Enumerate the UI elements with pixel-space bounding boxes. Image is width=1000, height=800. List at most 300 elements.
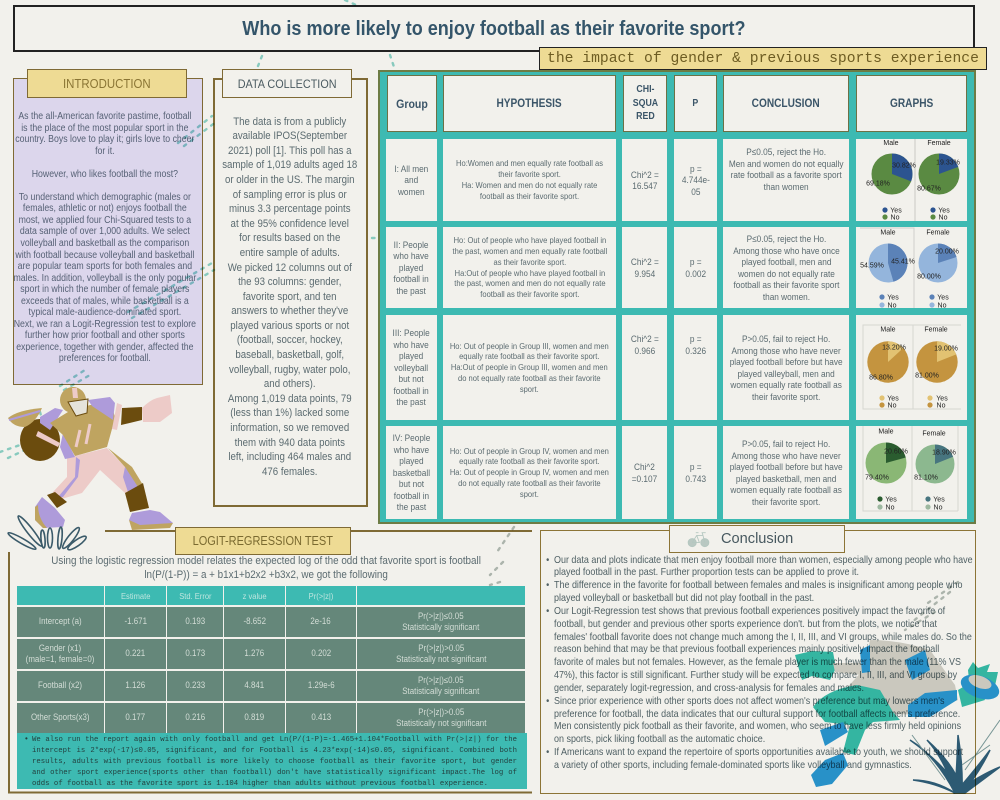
regression note: • <box>25 734 28 743</box>
regression table: Statistically significant <box>402 686 480 696</box>
heading: introduction: INTRODUCTION <box>63 76 151 91</box>
regression table: 2e-16 <box>311 616 331 626</box>
heading: logit-regression test: LOGIT-REGRESSION TEST <box>193 534 333 548</box>
chart: group IV pies: 20.60% <box>884 448 908 456</box>
panel: conclusion: • <box>546 554 549 566</box>
introduction body text: most, we applied four Chi-Squared tests to a <box>18 215 191 226</box>
regression table: Estimate <box>121 590 150 600</box>
hypothesis III: Ha:Out of people in Group III, women and men <box>451 362 608 372</box>
regression table: 1.29e-6 <box>308 680 334 690</box>
chart: group I pies: Yes <box>890 208 902 214</box>
conclusion III: P>0.05, fail to reject Ho. <box>742 333 830 344</box>
introduction body text: further how prior football and other sports <box>25 330 184 341</box>
group IV: the past <box>397 501 426 512</box>
row: football <box>17 671 104 701</box>
conclusion IV: played basketball, men and <box>736 472 836 484</box>
conclusion III: women equally rate football as <box>730 379 842 390</box>
row: football: Football (x2) <box>38 680 83 690</box>
conclusion I: rate football as a favorite sport <box>731 169 841 180</box>
introduction body text: exceeds that of males, while basketball is a <box>21 296 188 307</box>
chart: group I pies: 80.67% <box>917 186 941 192</box>
conclusion bullets: Men consistently pick football as their favorite, and women, who seem to have less firmly held opinions <box>554 721 961 732</box>
data collection body text: entire sample of adults. <box>240 247 340 259</box>
conclusion I <box>723 139 849 221</box>
data collection body text: (less than 1%) lacked some <box>231 407 349 419</box>
data collection body text: at the 95% confidence level <box>231 218 349 230</box>
group IV: who have <box>394 444 429 455</box>
heading: conclusion <box>669 525 845 553</box>
title box: Who is more likely to enjoy football as their favorite sport? <box>242 16 746 40</box>
group III: the past <box>397 396 426 407</box>
data collection body text: volleyball, rugby, water polo, <box>229 364 351 376</box>
data collection body text: Among 1,019 data points, 79 <box>228 393 352 405</box>
conclusion bullets: preference for football, the data indicates that our cultural support for football affects men's preference. <box>554 709 960 720</box>
chart: group IV pies: Male <box>878 428 894 436</box>
graphs background II <box>856 227 967 308</box>
hypothesis I: their favorite sport. <box>498 169 561 179</box>
data collection body text: left, including 464 males and <box>229 451 351 463</box>
regression table: Pr(>|z|)≤0.05 <box>418 611 464 621</box>
p value I: p = <box>690 163 701 174</box>
footprint trails <box>0 0 958 630</box>
header: chi-squared: CHI- <box>636 84 654 95</box>
introduction body text: is the place of the most popular sport in the <box>21 123 188 134</box>
chart: group I pies: 30.82% <box>892 162 916 170</box>
conclusion IV: women equally rate football as <box>730 484 842 495</box>
chart: group II pies: Male <box>880 230 896 236</box>
chart: group III pies: Female <box>924 326 948 334</box>
chart: group I pies: No <box>891 214 900 222</box>
model description: Using the logistic regression model relates the expected log of the odd that favorite sport is football <box>51 555 481 567</box>
chart: group III pies: 86.80% <box>869 374 893 382</box>
conclusion bullets: females' football favorite does not change much among the I, II, III, and VI groups, while males do. So the <box>554 632 971 643</box>
conclusion bullets: Our Logit-Regression test shows that previous football experiences positively impact the favorite of <box>554 606 945 617</box>
conclusion IV: P>0.05, fail to reject Ho. <box>742 438 830 449</box>
hypothesis II: Ho: Out of people who have played football in <box>453 235 606 245</box>
panel: logit-regression test <box>8 527 532 794</box>
group II: who have <box>394 250 429 261</box>
chart: group I pies: Male <box>883 140 899 147</box>
regression table: 0.413 <box>311 712 331 722</box>
header: graphs: GRAPHS <box>890 98 933 110</box>
hypothesis II <box>443 227 616 308</box>
regression table: 0.216 <box>185 712 205 722</box>
conclusion bullets: Since prior experience with other sports does not affect women's preference but may lowers men's <box>554 696 944 707</box>
chart: group II pies <box>860 228 959 310</box>
regression table <box>17 586 525 733</box>
regression table: -8.652 <box>243 616 266 626</box>
panel: conclusion: • <box>546 580 549 591</box>
hypothesis I: Ha: Women and men do not equally rate <box>462 180 597 190</box>
group I: women <box>398 186 425 197</box>
regression table: 0.177 <box>126 712 145 722</box>
hypothesis III: do not equally rate football as their favorite <box>458 373 601 383</box>
panel: conclusion: • <box>546 696 549 707</box>
introduction body text: males. In addition, volleyball is the only popular <box>13 273 196 284</box>
group I <box>386 139 437 221</box>
header: chi-squared: SQUA <box>632 98 658 109</box>
graphs background III <box>856 315 967 420</box>
data collection body text: available IPOS(September <box>233 130 347 142</box>
row: other sports <box>17 703 104 733</box>
row: gender: Gender (x1) <box>39 643 82 653</box>
conclusion bullets: played volleyball or basketball but did not play football in the past. <box>554 593 814 604</box>
chi-squared IV: =0.107 <box>632 472 657 484</box>
chart: group I pies <box>866 139 960 222</box>
data collection body text: 2021) poll [1]. This poll has a <box>228 145 352 157</box>
introduction body text: data sample of over 1,000 adults. We select <box>20 226 189 237</box>
header: graphs <box>856 75 967 132</box>
row: intercept <box>17 607 104 637</box>
icon: quarterback player <box>8 387 173 530</box>
introduction body text: typical male-audience-dominated sport. <box>28 307 181 318</box>
conclusion III: their favorite sport. <box>752 390 820 402</box>
group III: III: People <box>393 327 430 338</box>
regression table: Pr(>|z|) <box>309 590 333 600</box>
chart: group IV pies <box>863 426 958 512</box>
conclusion II: football as their favorite sport <box>733 279 839 290</box>
group III: who have <box>394 339 429 350</box>
conclusion bullets: 47%), this factor is still significant. Further study will be expected to compare I, II, III, and VI groups by <box>554 670 957 681</box>
header cells <box>17 586 104 605</box>
conclusion bullets: The difference in the favorite for football between females and males is insignificant among people who <box>554 580 962 591</box>
conclusion bullets: If Americans want to expand the repertoire of sports opportunities available to youth, we should support <box>554 747 963 758</box>
conclusion II: than women. <box>762 290 810 302</box>
header: p: P <box>693 98 698 109</box>
conclusion I: P≤0.05, reject the Ho. <box>746 146 826 157</box>
hypothesis IV: sport. <box>520 489 539 499</box>
header: conclusion <box>723 75 849 132</box>
title box <box>13 5 975 52</box>
chart: group I pies: Female <box>927 140 951 147</box>
icon: bicycle <box>688 532 710 548</box>
chi-squared II <box>622 227 667 308</box>
conclusion bullets <box>546 554 972 771</box>
panel: data collection <box>213 78 368 507</box>
p value II: p = <box>690 256 701 267</box>
model description <box>51 555 481 581</box>
conclusion bullets: Our data and plots indicate that men enjoy football more than women, especially among people who have <box>554 554 972 566</box>
chart: group IV pies: 81.10% <box>914 474 938 482</box>
group III: football in <box>394 385 429 396</box>
chart: group IV pies: Yes <box>885 496 897 504</box>
heading: data collection <box>222 69 352 98</box>
hypothesis I <box>443 139 616 221</box>
introduction body text: To understand which demographic (males or <box>18 192 191 203</box>
group III: but not <box>399 373 424 384</box>
chart: group IV pies: No <box>886 504 895 512</box>
regression note: We also run the report again with only football and get Ln(P/(1-P)=-1.465+1.104*Football with Pr(>|z|) for the <box>32 736 517 744</box>
regression table: Statistically significant <box>402 622 480 632</box>
data collection body text: sample of 1,019 adults aged 18 <box>222 159 358 171</box>
panel: chi-squared table <box>378 70 976 524</box>
data collection body text: or older in the US. The margin <box>225 174 355 186</box>
chi-squared I <box>622 139 667 221</box>
table header row <box>387 75 967 132</box>
hypothesis IV: Ho: Out of people in Group IV, women and men <box>450 446 609 456</box>
panel: introduction <box>13 78 203 385</box>
data collection body text: information, so we removed <box>231 422 349 434</box>
group I: I: All men <box>395 163 428 174</box>
regression table: Pr(>|z|)>0.05 <box>418 707 464 717</box>
group IV: basketball <box>393 467 430 478</box>
conclusion label: Conclusion <box>721 531 793 547</box>
chart: group III pies: Yes <box>936 396 948 402</box>
p value IV: 0.743 <box>685 472 706 484</box>
data collection body text: favorite sport, and ten <box>243 291 337 303</box>
hypothesis II: the past, women and men do not equally rate <box>454 278 605 288</box>
group II: played <box>399 262 424 273</box>
regression table: Pr(>|z|)≤0.05 <box>418 675 464 685</box>
data collection body text: the 93 columns: gender, <box>238 276 342 288</box>
graphs background I <box>856 139 967 221</box>
data collection body text: and others). <box>264 378 316 390</box>
regression table: 0.173 <box>185 648 205 658</box>
chi-squared IV: Chi^2 <box>634 461 655 472</box>
regression table: Pr(>|z|)>0.05 <box>418 643 464 653</box>
group II <box>386 227 437 308</box>
chi-squared II: Chi^2 = <box>631 256 658 267</box>
conclusion IV: played football before but have <box>730 461 842 472</box>
hypothesis IV: equally rate football as their favorite sport. <box>459 456 600 466</box>
chart: group II pies: Yes <box>937 294 949 302</box>
chart: group II pies: Female <box>926 230 950 236</box>
p value III: 0.326 <box>685 344 706 356</box>
chart: group II pies: No <box>888 302 897 310</box>
conclusion II: Among those who have once <box>733 244 839 256</box>
chart: group IV pies: No <box>934 504 943 512</box>
header: chi-squared <box>623 75 667 132</box>
hypothesis I: football as their favorite sport. <box>480 191 579 201</box>
regression table: 0.233 <box>185 680 205 690</box>
regression note: odds of football as the favorite sport is 1.104 higher than adults without previous football experience. <box>32 780 488 788</box>
hypothesis III <box>443 315 616 420</box>
chart: group IV pies: Female <box>922 430 946 438</box>
row: other sports: Other Sports(x3) <box>31 712 90 722</box>
data collection body text: baseball, basketball, golf, <box>236 349 344 361</box>
hypothesis II: the past, women and men equally rate football <box>452 246 607 256</box>
data collection body text: minus 3.3 percentage points <box>229 203 351 215</box>
header: hypothesis: HYPOTHESIS <box>497 98 562 110</box>
regression note <box>17 733 527 789</box>
heading: logit-regression test <box>175 527 351 555</box>
header: group: Group <box>396 96 428 110</box>
header: chi-squared: RED <box>636 111 654 122</box>
chi-squared I: 16.547 <box>632 180 657 191</box>
introduction body text: As the all-American favorite pastime, football <box>18 111 191 122</box>
header: hypothesis <box>443 75 616 132</box>
hypothesis II: football as their favorite sport. <box>480 289 579 299</box>
data collection body text: played various sports or not <box>231 320 349 332</box>
table body rows <box>386 139 967 519</box>
conclusion bullets: reason behind that may be that previous football experiences mainly positively impact the football <box>554 644 939 655</box>
group III: volleyball <box>395 362 428 373</box>
group II: II: People <box>394 239 429 250</box>
p value I: 4.744e- <box>682 174 709 185</box>
conclusion II: women do not equally rate <box>738 268 834 278</box>
p value I <box>674 139 717 221</box>
introduction body text: volleyball and basketball as the comparison <box>20 238 189 249</box>
regression table: 0.819 <box>245 712 264 722</box>
p value III <box>674 315 717 420</box>
hypothesis IV: Ha: Out of people in Group IV, women and men <box>450 467 609 477</box>
introduction body text: females, athletic or not) enjoys football the <box>23 203 186 214</box>
regression table: Statistically not significant <box>396 654 486 664</box>
group IV <box>386 426 437 519</box>
header: group <box>387 75 437 132</box>
icon: left grass <box>7 514 88 552</box>
regression table: 0.202 <box>311 648 331 658</box>
chi-squared III: 0.966 <box>634 344 655 356</box>
regression note: results, adults with previous football is more likely to choose football as their favorite sport, but gender <box>32 758 517 766</box>
conclusion III <box>723 315 849 420</box>
header: p <box>674 75 717 132</box>
group IV: played <box>399 455 424 466</box>
group II: football in <box>394 273 429 284</box>
conclusion IV: their favorite sport. <box>752 496 820 506</box>
introduction body text: experience, together with gender, affected the <box>16 342 193 353</box>
p value I: 05 <box>691 186 700 197</box>
chi-squared II: 9.954 <box>634 268 655 278</box>
chi-squared III: Chi^2 = <box>631 333 658 344</box>
conclusion bullets: gender, separately logit-regression, and cross-analysis for females and males. <box>554 683 863 694</box>
row: intercept: Intercept (a) <box>39 616 82 626</box>
data collection body text: (football, soccer, hockey, <box>237 334 343 346</box>
conclusion IV: Among those who have never <box>731 450 841 460</box>
data collection body text: for results based on the <box>239 232 341 244</box>
group IV: football in <box>394 490 429 501</box>
introduction body text <box>13 111 196 364</box>
data collection body text <box>222 116 358 478</box>
chi-squared IV <box>622 426 667 519</box>
conclusion bullets: on sports, pick liking football as the automatic choice. <box>554 734 765 745</box>
chart: group III pies: 19.00% <box>934 346 958 352</box>
group IV: but not <box>399 478 424 489</box>
regression table: 1.126 <box>126 680 145 690</box>
heading: introduction <box>27 69 187 98</box>
chart: group I pies: 19.33% <box>936 160 960 166</box>
chart: group II pies: 80.00% <box>917 274 941 280</box>
icon: diving player <box>795 640 1000 787</box>
hypothesis II: as their favorite sport. <box>493 257 566 267</box>
panel: conclusion: • <box>546 606 549 617</box>
chart: group III pies: Yes <box>887 396 899 402</box>
introduction body text: preferences for football. <box>59 353 150 364</box>
conclusion IV <box>723 426 849 519</box>
group IV: IV: People <box>393 432 430 443</box>
panel: conclusion <box>540 530 976 794</box>
hypothesis III: sport. <box>520 384 539 394</box>
chi-squared III <box>622 315 667 420</box>
chart: group IV pies: 18.90% <box>932 450 956 456</box>
chart: group III pies: 13.20% <box>882 344 906 352</box>
conclusion bullets: a variety of other sports, including female-dominated sports like volleyball and gymnastics. <box>554 760 911 771</box>
conclusion III: played football before but have <box>730 356 842 367</box>
regression table: z value <box>243 590 266 600</box>
panel frame <box>8 530 532 794</box>
conclusion bullets: favorite of males but not females. However, as the female player is much fewer than the male (11% VS <box>554 657 960 668</box>
data collection body text: We picked 12 columns out of <box>228 262 352 274</box>
group I: and <box>405 174 418 185</box>
regression table: 1.276 <box>245 648 264 658</box>
introduction body text: Next, we ran a Logit-Regression test to explore <box>13 319 196 330</box>
chart: group II pies: No <box>938 302 947 310</box>
conclusion III: played valleyball, men and <box>737 368 835 378</box>
regression table: Std. Error <box>179 590 211 600</box>
data collection body text: of sampling error is plus or <box>233 189 347 201</box>
hypothesis IV <box>443 426 616 519</box>
p value III: p = <box>690 333 701 344</box>
chart: group III pies: 81.00% <box>915 372 939 380</box>
p value IV: p = <box>690 461 701 472</box>
hypothesis III: Ho: Out of people in Group III, women and men <box>450 340 609 350</box>
icon: right grass <box>910 720 1000 793</box>
data collection body text: answers to whether they've <box>231 305 348 317</box>
model description: ln(P/(1-P)) = a + b1x1+b2x2 +b3x2, we got the following <box>144 569 388 581</box>
hypothesis I: Ho:Women and men equally rate football as <box>456 158 603 168</box>
chart: group II pies: Yes <box>887 294 899 302</box>
data collection body text: The data is from a publicly <box>234 116 346 128</box>
chart: group III pies: No <box>937 402 946 410</box>
p value II: 0.002 <box>685 268 706 278</box>
conclusion III: Among those who have never <box>731 344 841 356</box>
chart: group IV pies: 79.40% <box>865 474 889 482</box>
panel: conclusion: • <box>546 747 549 758</box>
regression table: -1.671 <box>124 616 147 626</box>
subtitle banner <box>539 47 987 70</box>
p value IV <box>674 426 717 519</box>
group III: played <box>399 350 424 361</box>
chi-squared I: Chi^2 = <box>631 168 658 180</box>
conclusion bullets: played football in the past. Further proportion tests can be applied to prove it. <box>554 567 859 578</box>
data collection body text: 476 females. <box>262 466 318 478</box>
regression table: 0.193 <box>185 616 205 626</box>
introduction body text: are popular team sports for both females and <box>17 261 192 272</box>
header: conclusion: CONCLUSION <box>752 98 820 110</box>
data collection body text: them with 940 data points <box>235 437 345 449</box>
regression table: 4.841 <box>245 680 264 690</box>
conclusion II: played football, men and <box>741 256 831 267</box>
p value II <box>674 227 717 308</box>
regression table: Statistically not significant <box>396 718 486 728</box>
regression note: intercept is 2*exp(-17)≤0.05, significant, and for Football is 4.23*exp(-14)≤0.05, significant. Combined both <box>32 746 517 754</box>
introduction body text: However, who likes football the most? <box>31 169 178 180</box>
heading: data collection: DATA COLLECTION <box>238 76 336 90</box>
group III <box>386 315 437 420</box>
introduction body text: for it. <box>95 146 114 157</box>
subtitle banner: the impact of gender & previous sports experience <box>547 50 979 66</box>
conclusion I: than women <box>764 180 808 192</box>
regression table: 0.221 <box>126 648 145 658</box>
row: gender <box>17 639 104 669</box>
conclusion bullets: football, but gender and previous other sports experience don't. but from the plots, we notice that <box>554 619 936 630</box>
chart: group I pies: No <box>939 214 948 222</box>
row: gender: (male=1, female=0) <box>26 654 95 664</box>
introduction body text: sport in which the number of female players <box>20 284 189 295</box>
chart: group II pies: 54.59% <box>860 262 884 270</box>
regression note: and other sport experience(sports other than football) don't have statistically significant impact.The log of <box>32 769 517 777</box>
chart: group III pies: Male <box>880 326 896 334</box>
group II: the past <box>397 285 426 296</box>
chart: group I pies: Yes <box>938 208 950 214</box>
chart: group II pies: 20.00% <box>935 248 959 256</box>
hypothesis IV: do not equally rate football as their favorite <box>458 478 601 488</box>
conclusion II <box>723 227 849 308</box>
chart: group III pies: No <box>888 402 897 410</box>
graphs background IV <box>856 426 967 519</box>
hypothesis II: Ha:Out of people who have played football in <box>454 268 605 278</box>
introduction body text: country. Boys love to play it; girls love to cheer <box>15 134 194 145</box>
